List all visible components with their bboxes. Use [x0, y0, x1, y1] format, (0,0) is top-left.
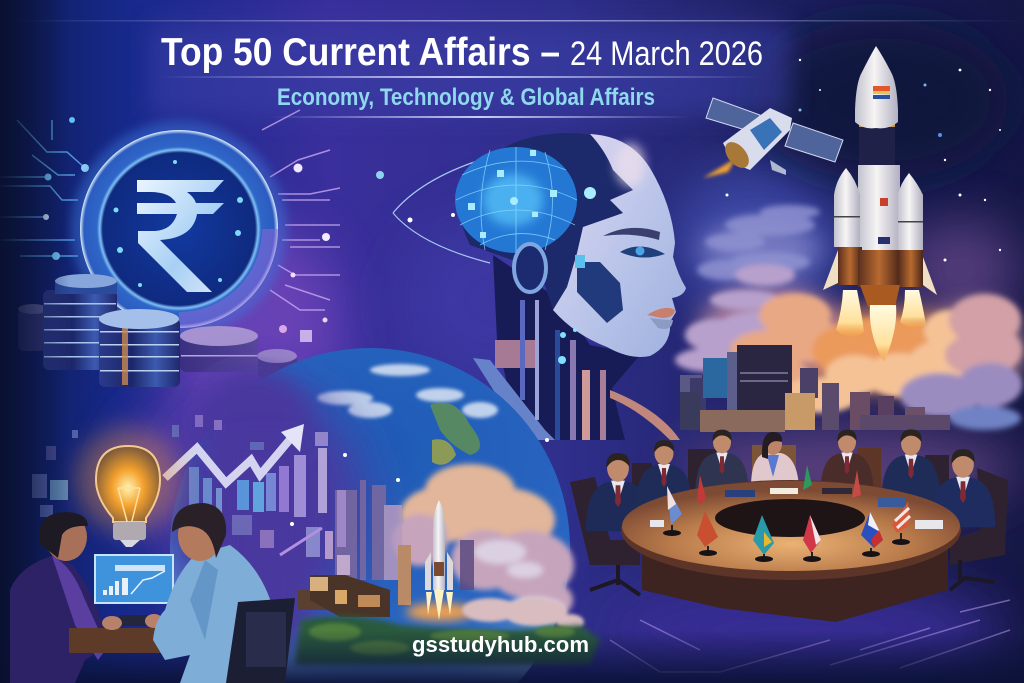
right man — [153, 545, 276, 683]
people at monitor — [10, 503, 295, 683]
keyboard and hands — [102, 614, 163, 630]
neck and wires — [493, 255, 640, 440]
title banner — [0, 20, 1024, 118]
title: Top 50 Current Affairs – — [161, 31, 560, 74]
left man — [10, 555, 108, 683]
site url: gsstudyhub.com — [412, 632, 589, 657]
face skin — [553, 134, 686, 357]
desk — [69, 628, 199, 653]
earth globe — [170, 348, 570, 683]
rocket — [823, 46, 937, 362]
eye and brow — [603, 228, 660, 240]
meeting around table — [570, 429, 1008, 622]
coin stacks — [18, 274, 297, 387]
subtitle: Economy, Technology & Global Affairs — [277, 84, 655, 111]
rupee emblem — [71, 121, 287, 337]
table well — [715, 499, 865, 537]
stars — [290, 59, 1001, 526]
chair — [226, 598, 295, 683]
cloud glow base — [700, 222, 1023, 395]
satellite — [703, 98, 843, 178]
ear — [514, 244, 546, 292]
city behind launch — [335, 480, 474, 590]
data squares — [32, 415, 347, 592]
launch pad and small rocket — [298, 500, 584, 630]
clouds — [675, 205, 1022, 430]
cheek circuit — [577, 262, 623, 323]
light bulb — [76, 428, 180, 547]
skull — [460, 133, 640, 340]
chairs — [570, 445, 1008, 565]
brain — [455, 147, 577, 253]
highlight — [615, 143, 645, 187]
monitor — [95, 555, 173, 603]
green ground — [295, 616, 600, 665]
growth chart with arrow — [165, 424, 350, 575]
earth launch cloud — [392, 464, 574, 623]
lips — [647, 308, 675, 318]
shoulder — [473, 358, 555, 440]
chair legs — [590, 560, 995, 595]
circuit nodes — [43, 117, 384, 342]
flags — [663, 465, 910, 562]
wire strips — [495, 300, 606, 440]
table top — [621, 480, 961, 580]
title: 24 March 2026 — [570, 35, 763, 73]
delegates — [586, 453, 650, 531]
documents — [650, 488, 943, 529]
city skyline — [680, 345, 950, 432]
AI head — [393, 133, 686, 440]
table base — [642, 550, 948, 622]
purple haze over globe — [165, 370, 365, 640]
